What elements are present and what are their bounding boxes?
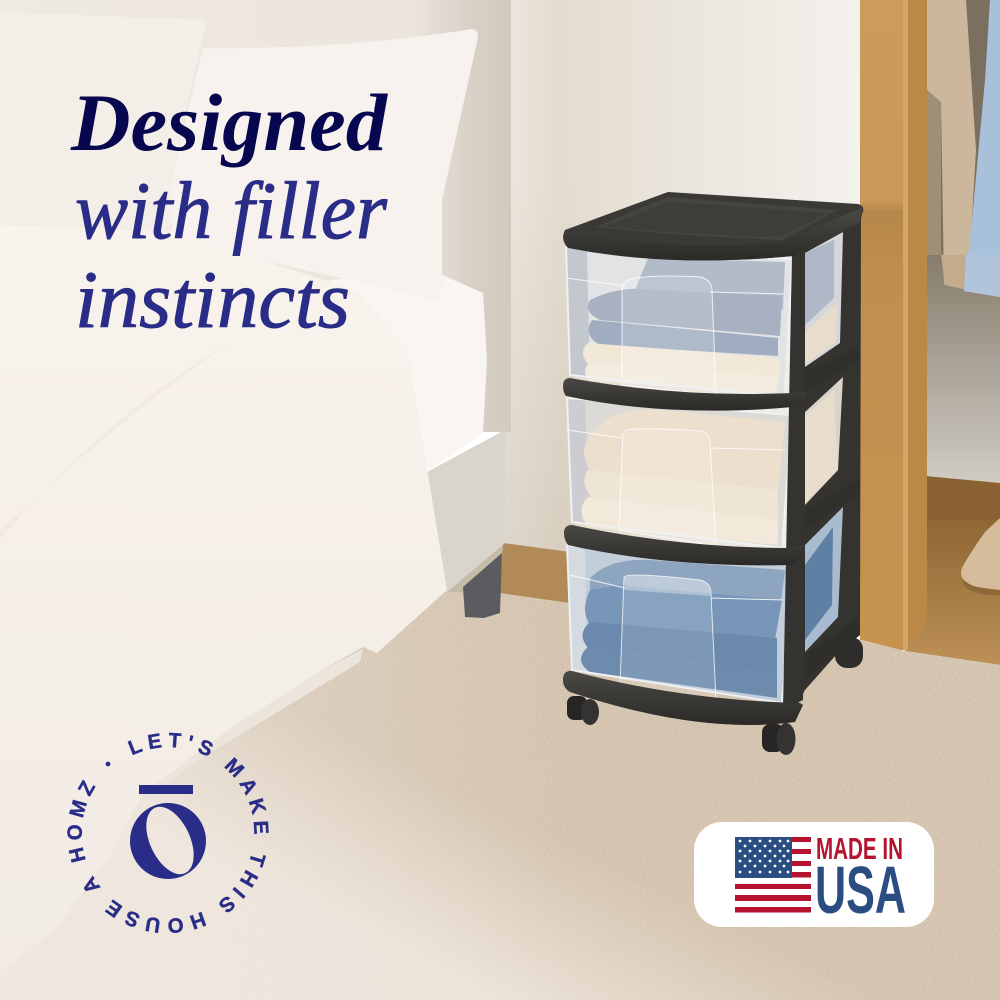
made in usa badge bbox=[694, 822, 934, 928]
base bbox=[563, 671, 803, 725]
bed base bbox=[420, 430, 505, 592]
side shelf 2 bbox=[805, 347, 860, 392]
circular slogan: LET'S MAKE THIS HOUSE A HOMZ bbox=[67, 732, 269, 933]
drawer unit bbox=[563, 192, 863, 755]
logo bar bbox=[139, 785, 193, 794]
duvet lower band bbox=[132, 649, 363, 818]
drawer 1 bbox=[566, 247, 792, 397]
side shelf bottom bbox=[805, 617, 860, 680]
drawer 3 bbox=[567, 545, 793, 703]
flag bbox=[735, 837, 811, 912]
carpet shadow under bed bbox=[440, 543, 505, 593]
duvet fold shade bbox=[0, 340, 232, 540]
wheels bbox=[567, 696, 796, 755]
front post bbox=[783, 250, 805, 710]
heading line 1: Designed bbox=[70, 77, 388, 168]
wood door post bbox=[860, 0, 927, 650]
headboard bbox=[0, 0, 511, 432]
usa text: USA bbox=[815, 853, 906, 928]
side window 1 bbox=[805, 232, 843, 367]
logo badge bbox=[67, 732, 269, 933]
hanging clothes bbox=[927, 0, 1000, 297]
carpet bbox=[0, 590, 1000, 1000]
back wheel bbox=[835, 637, 863, 668]
made in text: MADE IN bbox=[816, 832, 903, 866]
lid bbox=[563, 192, 863, 260]
side shelf 3 bbox=[805, 478, 860, 530]
bed leg bbox=[463, 553, 502, 618]
badge background bbox=[694, 822, 934, 927]
front pillow bbox=[172, 29, 478, 300]
slogan dot bbox=[106, 762, 110, 766]
mattress bbox=[330, 273, 487, 470]
heading line 3: instincts bbox=[75, 254, 350, 345]
heading line 2: with filler bbox=[75, 165, 388, 256]
wall bbox=[500, 0, 870, 620]
back pillow bbox=[0, 12, 207, 240]
shoe bbox=[961, 518, 1000, 595]
side frame bbox=[785, 215, 861, 710]
drawer 2 bbox=[567, 398, 792, 548]
rim 3 bbox=[564, 525, 805, 565]
logo ring bbox=[130, 803, 206, 879]
rim 2 bbox=[563, 378, 805, 411]
side window 2 bbox=[805, 377, 843, 505]
heading bbox=[70, 77, 388, 345]
closet interior bbox=[905, 0, 1000, 665]
baseboard bbox=[500, 543, 570, 603]
duvet bbox=[0, 225, 447, 973]
side window 3 bbox=[805, 507, 843, 652]
